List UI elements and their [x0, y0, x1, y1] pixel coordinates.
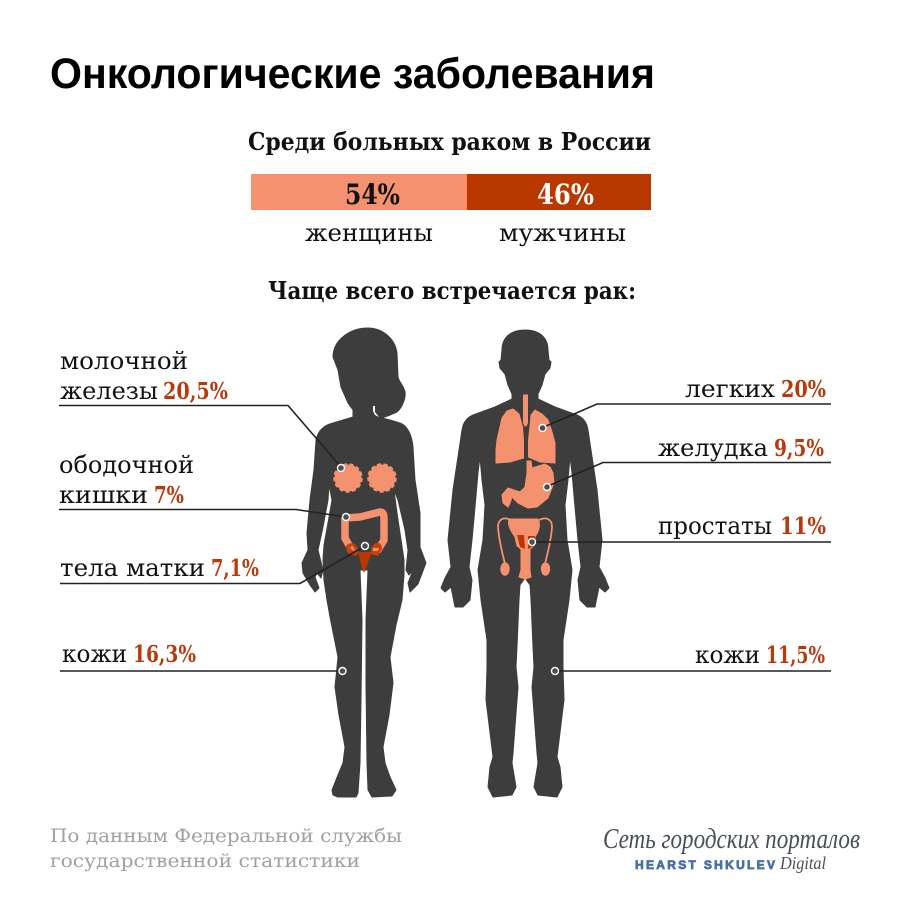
organ: breasts: [334, 464, 396, 492]
source note: [50, 825, 402, 872]
callout: breast cancer: [59, 347, 344, 472]
stacked bar: women and men share: [251, 174, 651, 211]
organ: uterus: [346, 543, 382, 573]
organ: trachea and lungs: [496, 395, 555, 463]
callout: male skin cancer: [552, 641, 831, 674]
stacked bar: women and men share: 54%: [345, 178, 400, 211]
callout: colon cancer: 7%: [154, 482, 184, 509]
callout: lung cancer: легких: [685, 375, 775, 403]
callout: female skin cancer: [60, 640, 346, 674]
callout: breast cancer: молочной: [60, 347, 188, 375]
callout: breast cancer: 20,5%: [163, 378, 228, 405]
source note: государственной статистики: [50, 850, 360, 872]
female silhouette: [302, 328, 426, 797]
callout: female skin cancer: кожи: [62, 640, 127, 668]
publisher logo: [603, 824, 860, 873]
heading: among cancer patients in Russia: Среди больных раком в России: [248, 127, 651, 156]
callout: male skin cancer: кожи: [695, 641, 760, 669]
callout: colon cancer: кишки: [59, 481, 148, 509]
callout: uterine cancer: тела матки: [60, 554, 205, 582]
publisher logo: HEARST SHKULEV: [635, 858, 775, 872]
source note: По данным Федеральной службы: [50, 825, 402, 847]
callout: colon cancer: ободочной: [59, 451, 194, 479]
organ: stomach: [502, 461, 554, 508]
bar label: women: женщины: [305, 219, 433, 247]
callout: stomach cancer: [544, 434, 831, 490]
callout: lung cancer: [539, 375, 831, 432]
callout: prostate cancer: простаты: [658, 512, 772, 540]
callout: lung cancer: 20%: [781, 376, 826, 403]
publisher logo: Digital: [779, 853, 826, 873]
callout: male skin cancer: 11,5%: [766, 642, 825, 669]
callout: stomach cancer: 9,5%: [774, 435, 824, 462]
callout: colon cancer: [59, 451, 350, 520]
bar label: men: мужчины: [499, 219, 626, 247]
callout: prostate cancer: [528, 512, 831, 546]
stacked bar: women and men share: 46%: [537, 178, 594, 211]
male silhouette: [441, 330, 609, 797]
callout: uterine cancer: 7,1%: [211, 555, 259, 582]
organ: male reproductive system: [498, 518, 552, 579]
callout: female skin cancer: 16,3%: [133, 641, 196, 668]
title: Онкологические заболевания: [50, 50, 655, 98]
callout: prostate cancer: 11%: [780, 513, 826, 540]
callout: stomach cancer: желудка: [658, 434, 768, 462]
organ: colon: [345, 512, 384, 550]
heading: most common cancers: Чаще всего встречается рак:: [268, 276, 636, 305]
callout: uterine cancer: [60, 542, 368, 584]
callout: breast cancer: железы: [60, 377, 158, 405]
